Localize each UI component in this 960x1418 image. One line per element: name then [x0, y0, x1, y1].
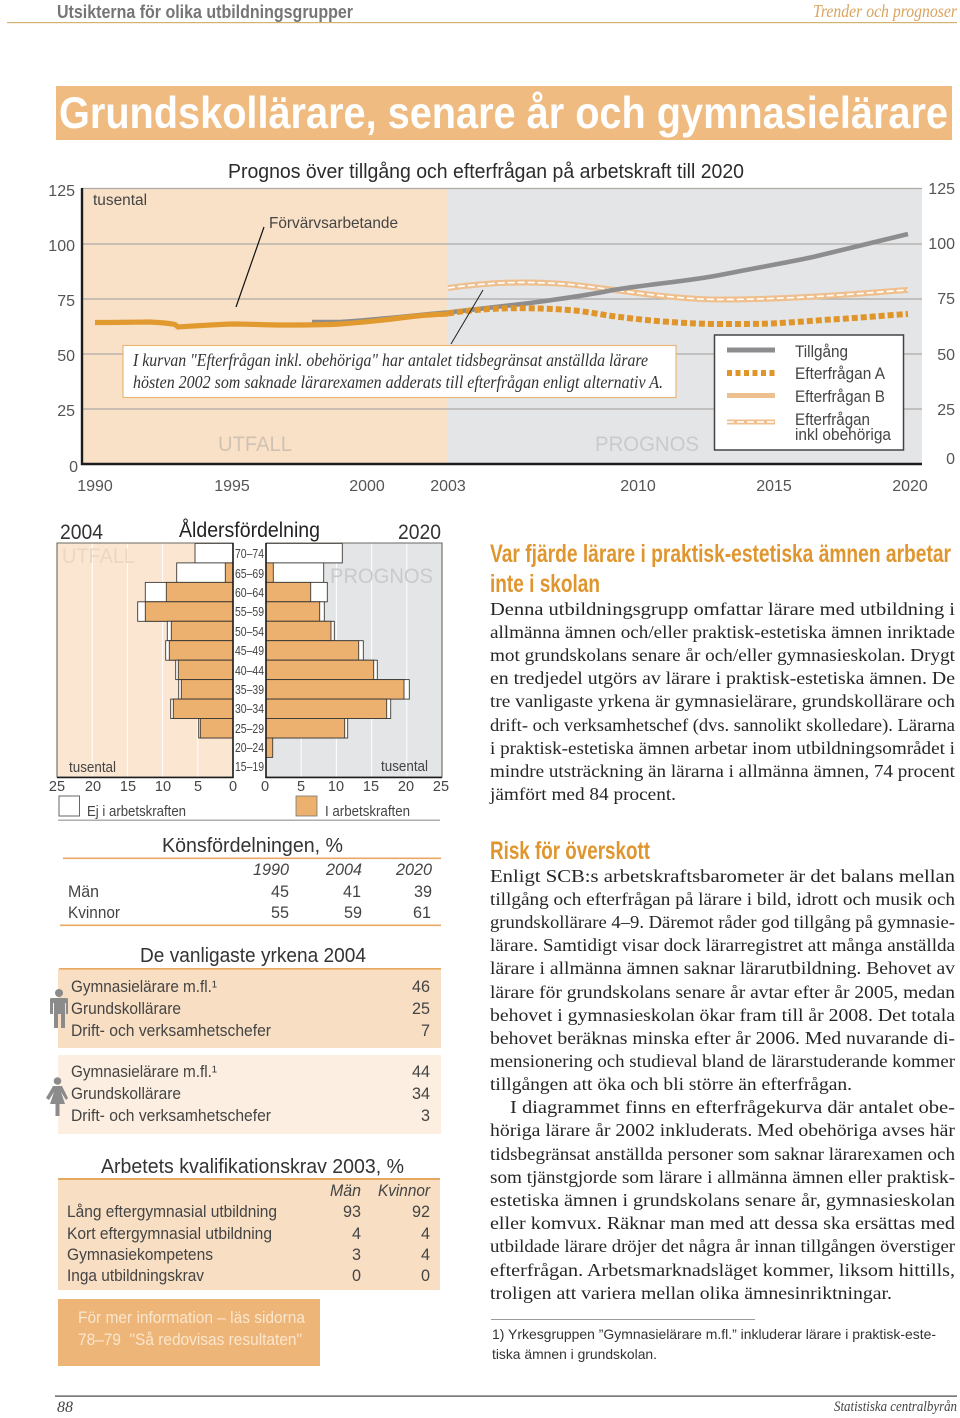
table: job qualification requirements: 3 — [352, 1246, 361, 1264]
text block: second section: behovet beräknas minska efter år 2006. Med nuvarande di- — [490, 1028, 955, 1048]
panel: women: Drift- och verksamhetschefer — [71, 1107, 272, 1125]
label: PROGNOS: PROGNOS — [330, 564, 433, 588]
text block: second section: utbildade lärare dröjer det några år innan tillgången överstiger — [490, 1236, 955, 1256]
panel: men: Grundskollärare — [71, 1000, 181, 1018]
x axis labels: 2003 — [430, 478, 466, 495]
panel: men — [50, 968, 441, 1048]
panel: women: Gymnasielärare m.fl.¹ — [71, 1063, 218, 1081]
pyramid x axis: 10 — [328, 779, 344, 795]
table: gender distribution: Män — [68, 883, 99, 901]
table: gender distribution: 45 — [271, 883, 289, 901]
pyramid x axis: 25 — [49, 779, 65, 795]
age labels: 70–74 — [235, 547, 264, 561]
text block: second section: lärare i allmänna ämnen saknar lärarutbildning. Behovet av — [490, 958, 956, 978]
panel: women: 44 — [412, 1063, 430, 1081]
text block: second section: estetiska ämnen i grundskolans senare år, gymnasieskolan — [490, 1190, 955, 1210]
text block: second section: tillgång och efterfrågan på lärare i bild, idrott och musik och — [490, 889, 955, 909]
leader line — [236, 227, 264, 307]
table: gender distribution: 61 — [413, 904, 431, 922]
footnote: tiska ämnen i grundskolan. — [492, 1346, 657, 1362]
x axis labels: 2020 — [892, 478, 928, 495]
table: job qualification requirements — [58, 1155, 440, 1290]
pyramid x axis: 10 — [155, 779, 171, 795]
y axis labels right: 0 — [946, 451, 955, 468]
text block: first section: drift- och verksamhetschef (dvs. sannolikt skolledare). Lärarna — [490, 715, 955, 736]
age labels: 30–34 — [235, 702, 264, 716]
pyramid x axis: 25 — [433, 779, 449, 795]
line chart: supply and demand forecast — [48, 160, 955, 495]
age labels: 20–24 — [235, 741, 264, 755]
y axis labels left: 100 — [48, 238, 75, 255]
age labels: 60–64 — [235, 586, 264, 600]
table: job qualification requirements: Inga utbildningskrav — [67, 1267, 205, 1285]
y axis labels right — [928, 181, 955, 468]
pyramid x axis: 15 — [120, 779, 136, 795]
panel: women — [46, 1055, 441, 1134]
y axis labels left: 50 — [57, 348, 75, 365]
unit label right: tusental — [381, 759, 428, 775]
table: job qualification requirements: Arbetets kvalifikationskrav 2003, % — [101, 1155, 404, 1178]
legend: Efterfrågan — [795, 411, 870, 429]
table: job qualification requirements: Kvinnor — [378, 1182, 431, 1200]
x axis labels — [77, 478, 928, 495]
unit label left: tusental — [69, 760, 116, 776]
icon: man — [50, 989, 68, 1028]
unit label: tusental — [93, 192, 147, 209]
panel: women: Grundskollärare — [71, 1085, 181, 1103]
pyramid x axis: 5 — [194, 779, 202, 795]
left bars 2004 — [138, 544, 233, 738]
pyramid headings: 2020 — [398, 521, 441, 544]
pyramid x axis: 20 — [398, 779, 414, 795]
pyramid headings — [60, 518, 441, 544]
legend: Efterfrågan B — [795, 388, 885, 406]
callout note: I kurvan "Efterfrågan inkl. obehöriga" har antalet tidsbegränsat anställda lärare — [132, 350, 648, 370]
pyramid x axis: 5 — [297, 779, 305, 795]
footnote — [491, 1319, 936, 1362]
panel: women: 34 — [412, 1085, 430, 1103]
y axis labels right: 125 — [928, 181, 955, 198]
line: demand A — [448, 308, 908, 324]
table: most common occupations 2004 — [46, 944, 441, 1134]
age labels: 35–39 — [235, 683, 264, 697]
age labels: 50–54 — [235, 625, 264, 639]
panel: men: 25 — [412, 1000, 430, 1018]
x axis labels: 2010 — [620, 478, 656, 495]
line: demand inkl obehöriga — [448, 282, 908, 300]
population pyramid: age distribution — [49, 518, 449, 821]
table: gender distribution: Kvinnor — [68, 904, 121, 922]
text block: first section — [489, 599, 955, 804]
text block: second section: tillgången att öka och bli större än efterfrågan. — [490, 1074, 852, 1094]
line: supply — [312, 234, 908, 322]
text block: second section — [490, 866, 956, 1303]
x axis labels: 1995 — [214, 478, 250, 495]
right bars 2020 — [266, 544, 409, 757]
age labels — [235, 547, 264, 774]
footnote: 1) Yrkesgruppen ”Gymnasielärare m.fl.” inkluderar lärare i praktisk-este- — [492, 1326, 936, 1342]
info box: 78–79 "Så redovisas resultaten" — [78, 1330, 302, 1349]
text block: first section: i praktisk-estetiska ämnen arbetar inom utbildningsområdet i — [490, 738, 955, 758]
page header — [7, 1, 958, 23]
table: most common occupations 2004: De vanligaste yrkena 2004 — [140, 944, 366, 967]
table: gender distribution: 41 — [343, 883, 361, 901]
label: PROGNOS: PROGNOS — [595, 432, 699, 456]
text block: second section: mensionering och studieval bland de lärarstuderande kommer — [490, 1051, 955, 1071]
text block: first section: allmänna ämnen och/eller praktisk-estetiska ämnen inriktade — [490, 622, 955, 642]
page footer: 88 — [57, 1399, 73, 1416]
label: UTFALL: UTFALL — [62, 544, 135, 568]
heading: Risk för överskott: Risk för överskott — [490, 837, 651, 865]
x axis labels: 2015 — [756, 478, 792, 495]
text block: first section: Denna utbildningsgrupp omfattar lärare med utbildning i — [490, 599, 955, 619]
pyramid headings: 2004 — [60, 521, 103, 544]
table: gender distribution: Könsfördelningen, % — [162, 834, 343, 857]
y axis labels left: 25 — [57, 403, 75, 420]
heading: Var fjärde lärare: inte i skolan — [490, 570, 600, 598]
callout note — [123, 346, 676, 398]
age labels: 15–19 — [235, 760, 264, 774]
table: gender distribution: 55 — [271, 904, 289, 922]
y axis labels left: 75 — [57, 293, 75, 310]
text block: second section: Enligt SCB:s arbetskraftsbarometer är det balans mellan — [490, 866, 955, 886]
table: job qualification requirements: 92 — [412, 1203, 430, 1221]
pyramid x axis: 20 — [85, 779, 101, 795]
legend: inkl obehöriga — [795, 426, 891, 444]
table: gender distribution: 2004 — [325, 861, 362, 879]
text block: second section: höriga lärare år 2002 inkluderats. Med obehöriga avses här — [490, 1120, 955, 1140]
age labels: 25–29 — [235, 722, 264, 736]
callout note: hösten 2002 som saknade lärarexamen adderats till efterfrågan enligt alternativ A. — [133, 372, 663, 392]
table: gender distribution: 2020 — [395, 861, 432, 879]
text block: first section: mot grundskolans senare år och/eller gymnasieskolan. Drygt — [490, 645, 955, 665]
chart title: Prognos över tillgång och efterfrågan på arbetskraft till 2020 — [228, 160, 744, 183]
legend — [714, 335, 904, 450]
pyramid x axis: 0 — [261, 779, 269, 795]
age labels: 40–44 — [235, 664, 264, 678]
text block: second section: troligen att variera mellan olika ämnesinriktningar. — [490, 1283, 892, 1303]
text block: second section: I diagrammet finns en efterfrågekurva där antalet obe- — [510, 1097, 955, 1117]
panel: men: 46 — [412, 978, 430, 996]
pyramid legend: I arbetskraften — [325, 804, 410, 820]
panel: men: Gymnasielärare m.fl.¹ — [71, 978, 218, 996]
table: job qualification requirements: Kort eftergymnasial utbildning — [67, 1225, 272, 1243]
table: gender distribution — [60, 834, 441, 926]
table: job qualification requirements: Män — [330, 1182, 361, 1200]
legend: Efterfrågan A — [795, 365, 885, 383]
info box — [58, 1299, 320, 1366]
icon: woman — [46, 1077, 68, 1116]
text block: second section: behovet i gymnasieskolan ökar fram till år 2008. Det totala — [490, 1005, 955, 1025]
text block: first section: jämfört med 84 procent. — [489, 784, 676, 804]
text block: second section: efterfrågan. Arbetsmarknadsläget kommer, liksom hittills, — [490, 1260, 955, 1280]
text block: first section: tre vanligaste yrkena är gymnasielärare, grundskollärare och — [490, 691, 955, 711]
pyramid headings: Åldersfördelning — [179, 518, 320, 542]
table: job qualification requirements: 0 — [352, 1267, 361, 1285]
text block: second section: eller komvux. Räknar man med att dessa ska ersättas med — [490, 1213, 955, 1233]
table: job qualification requirements: Gymnasiekompetens — [67, 1246, 213, 1264]
line: Förvärvsarbetande label: Förvärvsarbetande — [269, 215, 398, 232]
heading: Var fjärde lärare — [490, 540, 951, 598]
table: job qualification requirements: 4 — [421, 1225, 430, 1243]
page header: Utsikterna för olika utbildningsgrupper — [57, 2, 353, 22]
panel: women: 3 — [421, 1107, 430, 1125]
text block: second section: grundskollärare 4–9. Däremot råder god tillgång på gymnasie- — [490, 912, 955, 932]
table: job qualification requirements: 93 — [343, 1203, 361, 1221]
y axis labels left: 0 — [69, 459, 78, 476]
y axis labels right: 100 — [928, 236, 955, 253]
text block: second section: som tjänstgjorde som lärare i allmänna ämnen eller praktisk- — [490, 1167, 955, 1187]
table: job qualification requirements: 4 — [421, 1246, 430, 1264]
table: gender distribution: 39 — [414, 883, 432, 901]
age labels: 45–49 — [235, 644, 264, 658]
y axis labels left — [48, 183, 78, 476]
x axis labels: 1990 — [77, 478, 113, 495]
pyramid legend: Ej i arbetskraften — [87, 804, 186, 820]
pyramid x axis: 15 — [363, 779, 379, 795]
legend: Tillgång — [795, 343, 848, 361]
table: job qualification requirements: Lång eftergymnasial utbildning — [67, 1203, 277, 1221]
panel: men: Drift- och verksamhetschefer — [71, 1022, 272, 1040]
table: gender distribution: 1990 — [253, 861, 289, 879]
age labels: 55–59 — [235, 605, 264, 619]
age labels: 65–69 — [235, 567, 264, 581]
y axis labels right: 50 — [937, 347, 955, 364]
text block: second section: lärare för grundskolans senare år avtar efter år 2005, medan — [490, 982, 955, 1002]
text block: first section: en tredjedel utgörs av lärare i praktisk-estetiska ämnen. De — [490, 668, 955, 688]
pyramid x axis: 0 — [229, 779, 237, 795]
pyramid legend — [59, 796, 410, 820]
table: job qualification requirements: 0 — [421, 1267, 430, 1285]
line: employed — [95, 314, 448, 327]
y axis labels right: 75 — [937, 291, 955, 308]
table: job qualification requirements: 4 — [352, 1225, 361, 1243]
panel: men: 7 — [421, 1022, 430, 1040]
x axis labels: 2000 — [349, 478, 385, 495]
leader line to demand incl. — [451, 290, 483, 344]
text block: first section: mindre utsträckning än lärarna i allmänna ämnen, 74 procent — [490, 761, 955, 781]
info box: För mer information – läs sidorna — [78, 1308, 305, 1327]
y axis labels right: 25 — [937, 402, 955, 419]
pyramid x axis — [49, 779, 449, 795]
page footer — [55, 1396, 957, 1416]
text block: second section: tidsbegränsat anställda personer som saknar lärarexamen och — [490, 1144, 955, 1164]
label: UTFALL: UTFALL — [218, 432, 292, 456]
y axis labels left: 125 — [48, 183, 75, 200]
table: gender distribution: 59 — [344, 904, 362, 922]
text block: second section: lärare. Samtidigt visar dock lärarregistret att många anställda — [490, 935, 955, 955]
